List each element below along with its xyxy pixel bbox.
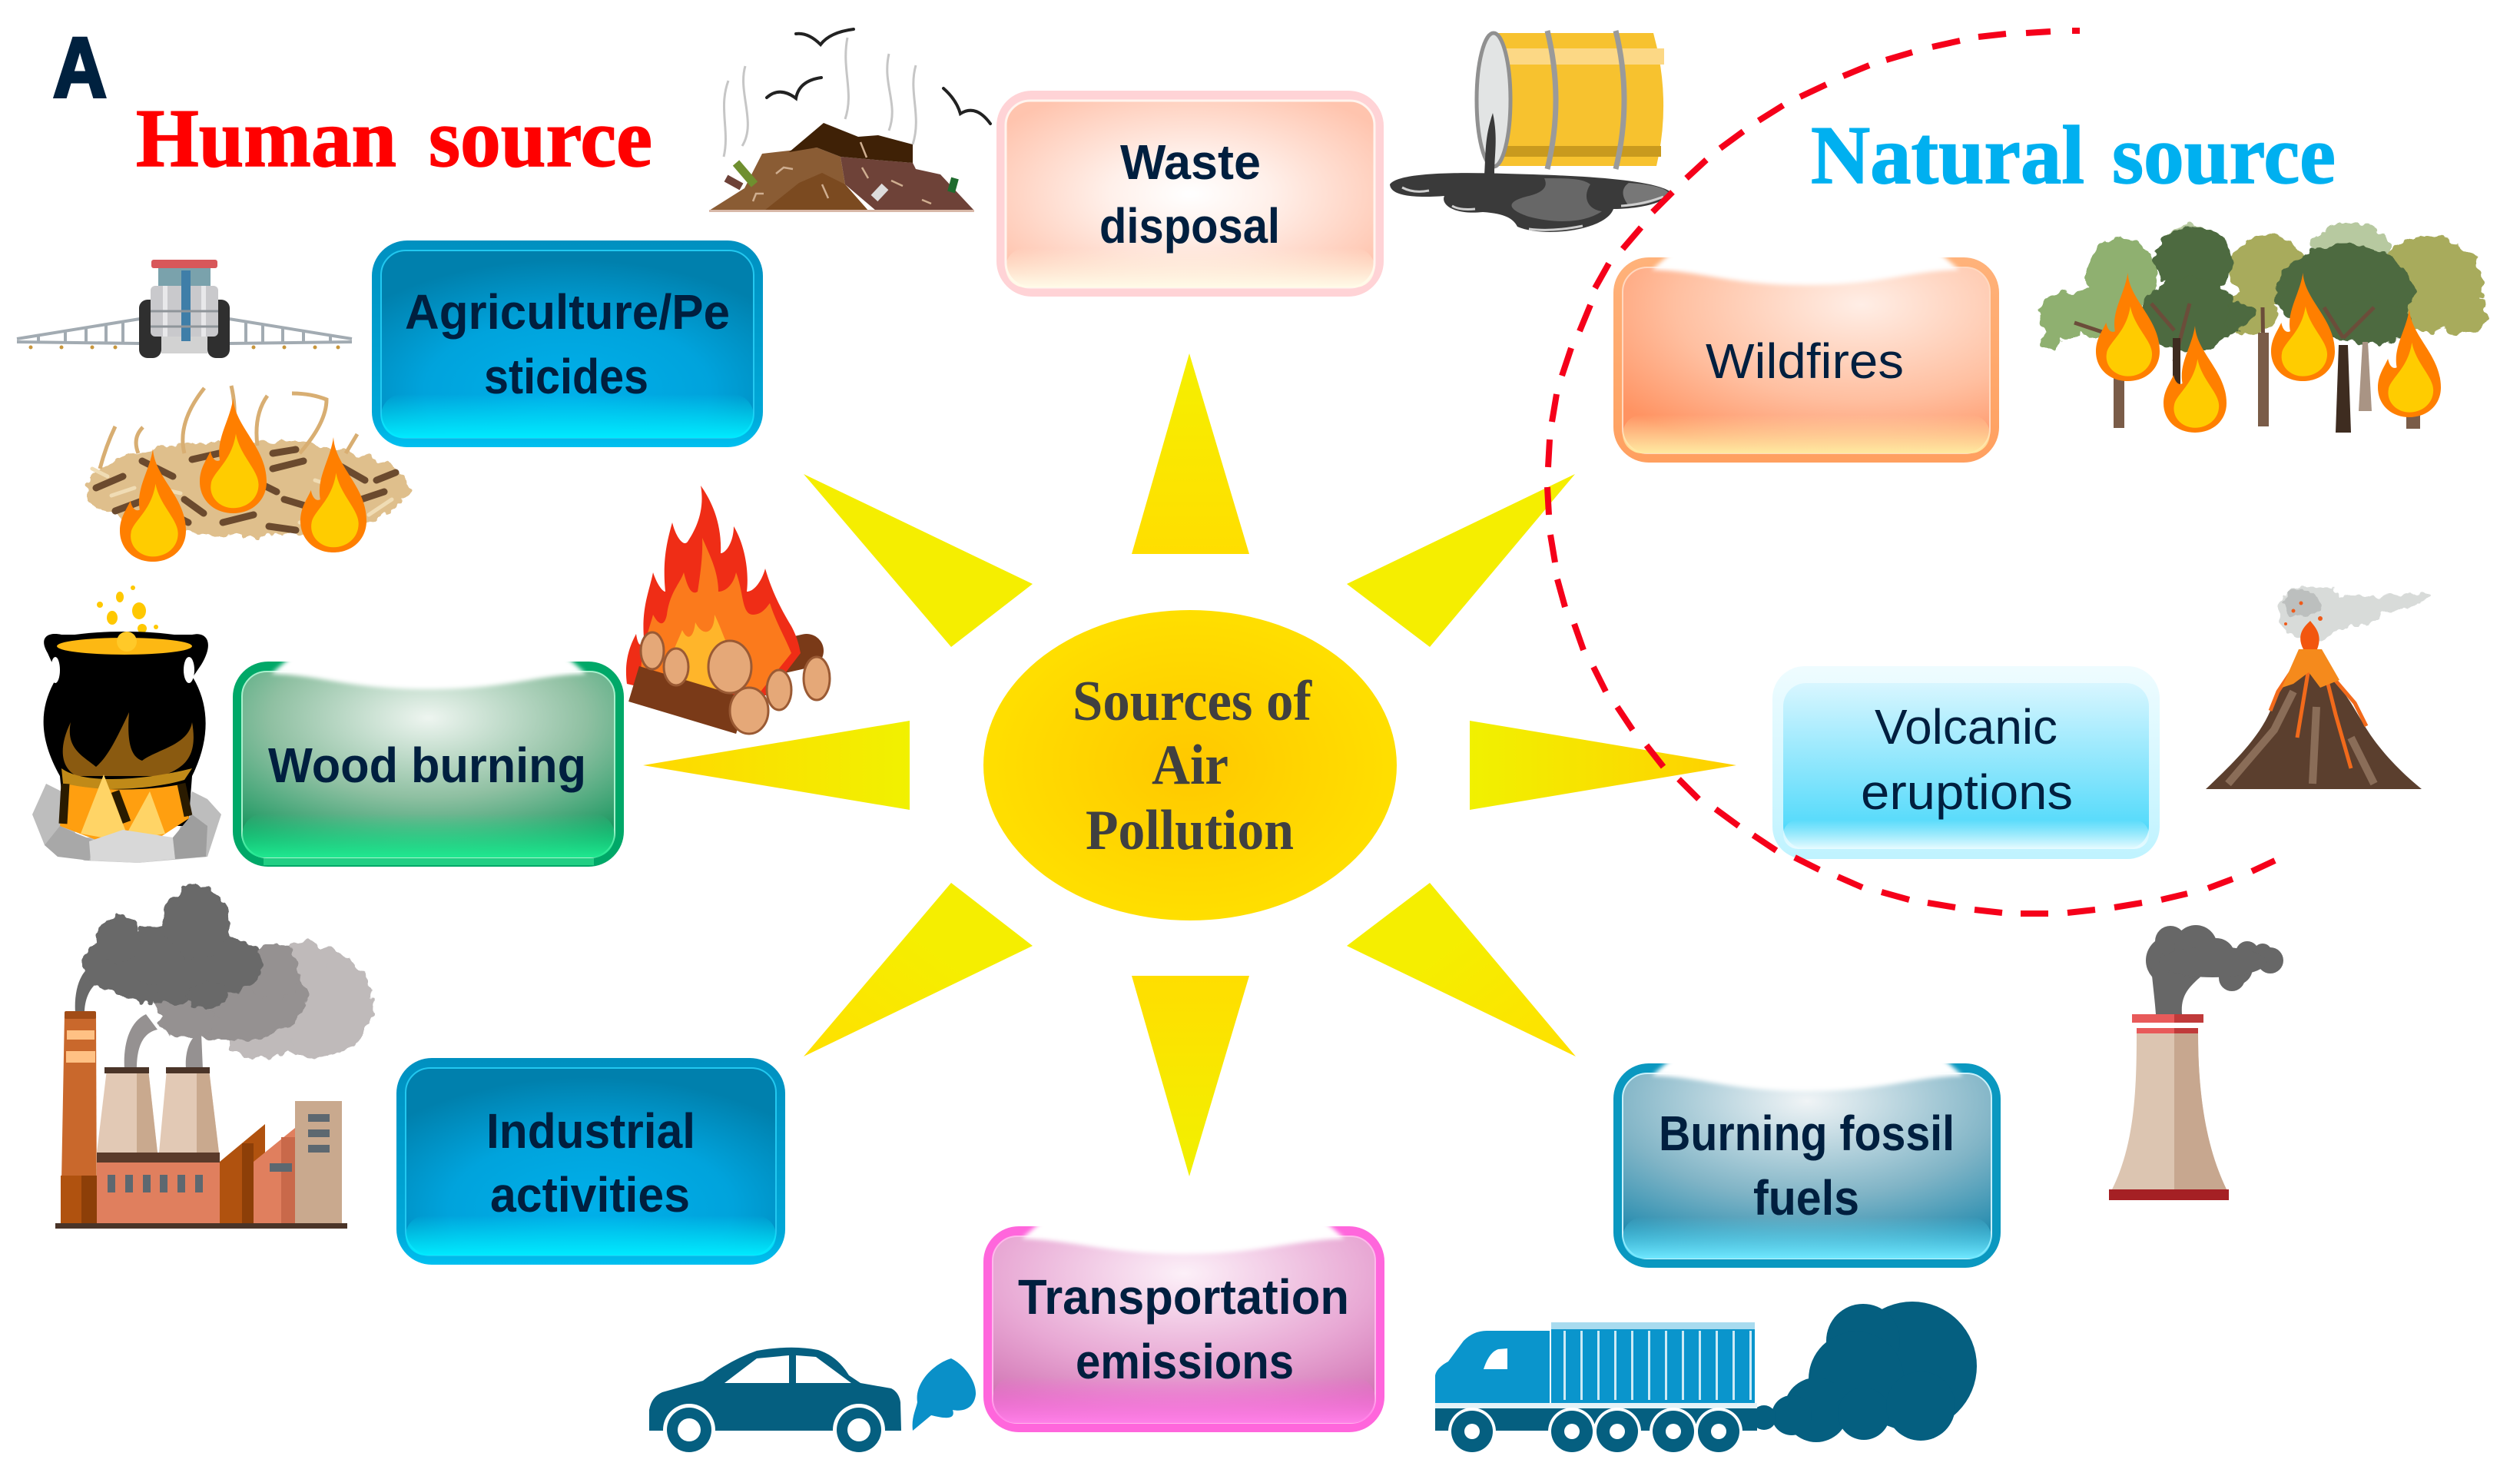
box: Industrial activities: Industrial — [486, 1103, 695, 1159]
icon: waste dump with birds — [709, 29, 990, 212]
box: Transportation emissions — [983, 1219, 1384, 1432]
box: Wildfires: Wildfires — [1706, 333, 1904, 389]
heading: Human source: Human — [136, 93, 396, 184]
heading: Human source — [136, 93, 652, 184]
box: Burning fossil fuels — [1613, 1056, 2001, 1268]
icon: truck with exhaust smoke — [1435, 1302, 1977, 1455]
icon: cooling tower with smoke — [2109, 925, 2283, 1200]
central sun: Sources of Air Pollution: Pollution — [1086, 799, 1294, 862]
icon: car with exhaust — [649, 1348, 976, 1456]
box: Volcanic eruptions: eruptions — [1861, 765, 2073, 820]
box: Burning fossil fuels: Burning fossil — [1659, 1106, 1955, 1161]
box: Waste disposal — [996, 91, 1384, 297]
heading: Natural source: Natural — [1811, 110, 2084, 201]
icon: crop sprayer tractor — [17, 260, 352, 358]
box: Agriculture/Pesticides: sticides — [484, 349, 648, 404]
dashed natural source boundary — [1547, 31, 2275, 914]
box: Transportation emissions: emissions — [1076, 1334, 1294, 1389]
box: Agriculture/Pesticides — [372, 240, 763, 447]
box: Transportation emissions: Transportation — [1018, 1269, 1349, 1325]
icon: campfire with logs — [626, 486, 830, 734]
icon: oil barrel and spill — [1390, 31, 1671, 232]
central sun: Sources of Air Pollution: Air — [1152, 734, 1228, 797]
icon: factory with smoke — [55, 885, 373, 1229]
box: Industrial activities: activities — [490, 1167, 690, 1222]
box: Waste disposal: disposal — [1099, 198, 1280, 254]
central sun: Sources of Air Pollution — [983, 610, 1397, 920]
box: Wood burning: Wood burning — [268, 738, 586, 793]
icon: cauldron over fire — [32, 585, 221, 863]
box: Wildfires — [1613, 250, 1999, 463]
heading: Natural source — [1811, 110, 2336, 201]
panel letter A: A — [53, 21, 107, 115]
box: Wood burning — [233, 654, 624, 867]
box: Volcanic eruptions: Volcanic — [1875, 699, 2057, 755]
box: Agriculture/Pesticides: Agriculture/Pe — [405, 284, 730, 340]
heading: Human source: source — [429, 93, 652, 184]
icon: erupting volcano — [2206, 585, 2432, 789]
sun rays — [643, 353, 1736, 1176]
box: Burning fossil fuels: fuels — [1753, 1170, 1859, 1226]
icon: burning crop residue pile — [86, 386, 409, 562]
heading: Natural source: source — [2112, 110, 2336, 201]
central sun: Sources of Air Pollution: Sources of — [1073, 670, 1312, 733]
box: Waste disposal: Waste — [1120, 134, 1261, 190]
box: Industrial activities — [396, 1058, 785, 1265]
icon: forest with wildfires — [2040, 224, 2488, 433]
box: Volcanic eruptions — [1772, 666, 2160, 859]
